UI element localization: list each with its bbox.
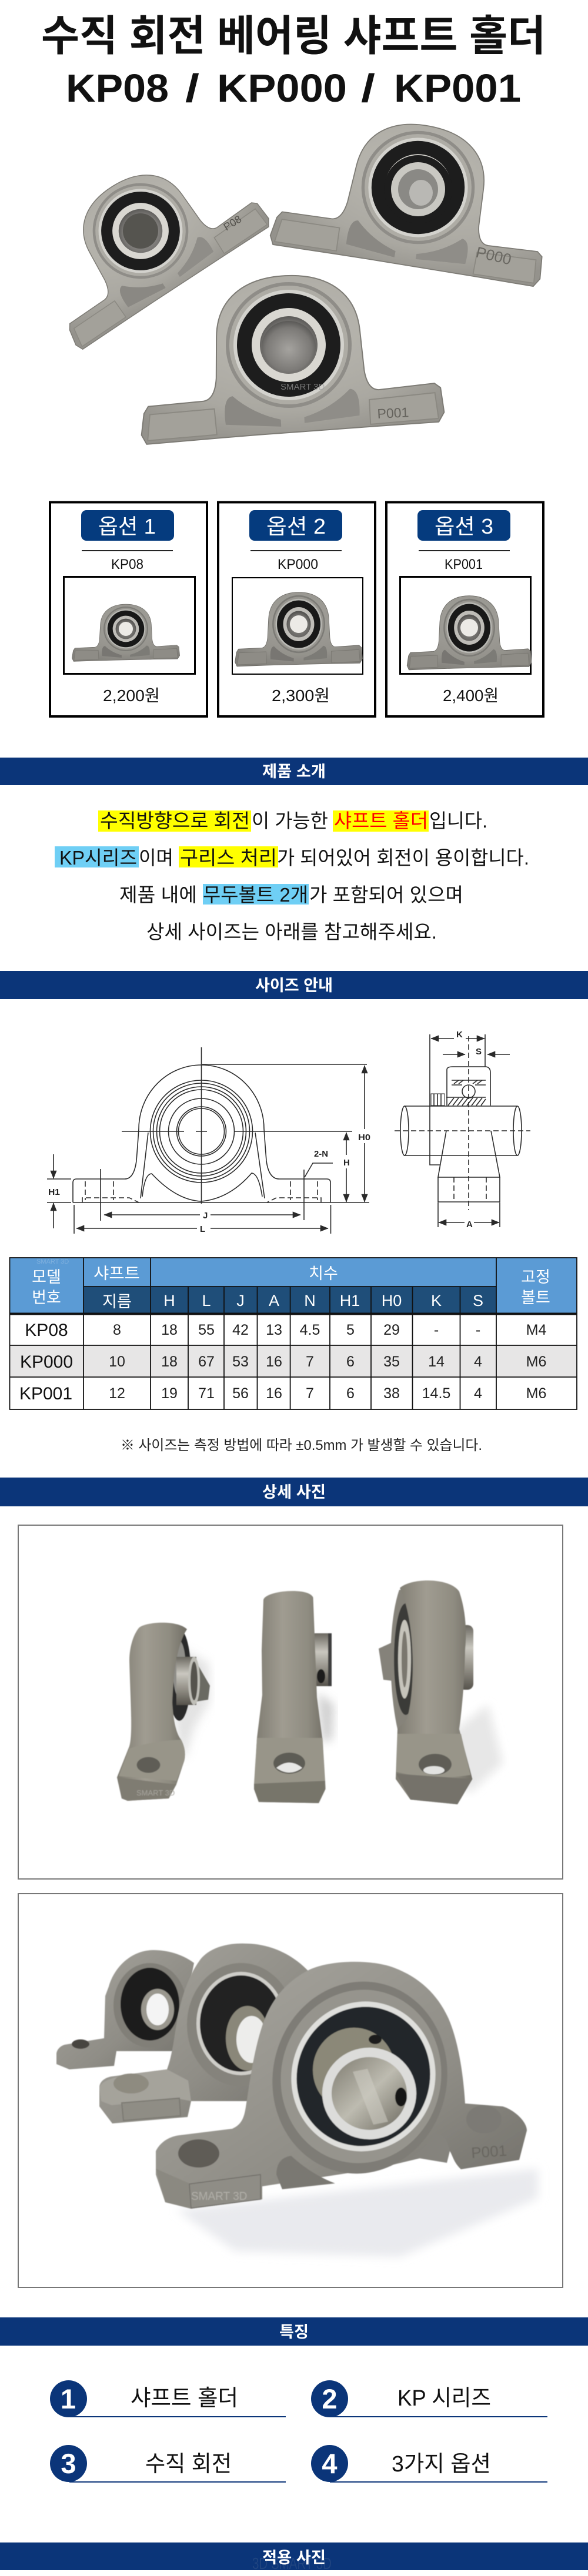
K dimension [430,1030,485,1106]
specification table [9,1258,577,1409]
product KP001 [133,268,445,444]
feature 1: 샤프트 홀더 [131,2386,238,2411]
bar title: 적용 사진 [262,2549,326,2567]
watermark: SMART 3D [280,382,325,392]
product KP08 [15,125,275,351]
row KP001: KP001 [19,1384,72,1403]
row KP001: 19 [161,1385,178,1402]
table header labels: 지름 [102,1293,132,1311]
row KP000: 4 [474,1354,482,1370]
housing and base [438,1067,500,1202]
feature 1 [50,2380,286,2417]
intro line 3: 무두볼트 2개 [203,884,308,906]
row KP08: 8 [113,1322,121,1338]
price: 2,300원 [272,686,330,705]
row KP000: 14 [428,1354,445,1370]
section bar: size guide: 사이즈 안내 [255,977,333,994]
2-N callout [305,1149,333,1177]
2-N callout: 2-N [314,1149,328,1159]
option cards [50,502,543,716]
product KP001: P001 [377,404,409,421]
housing rings [255,1965,465,2190]
feature 1: 1 [61,2383,76,2414]
title line 2: KP000 [217,66,347,110]
table header labels: N [304,1292,316,1309]
table grid [9,1258,577,1409]
intro line 2: 이며 [139,847,173,869]
section bar: features: 특징 [279,2323,309,2341]
table header labels: H0 [382,1292,402,1309]
bar watermark: 3D SMART 3D [252,2554,332,2572]
option 2 pill [249,510,342,541]
row KP001: 16 [266,1385,282,1402]
row KP08: 42 [232,1322,249,1338]
intro line 1 [98,810,487,832]
product KP000: P000 [475,243,513,269]
section bar: features [0,2317,588,2346]
option 3 pill: 옵션 3 [435,514,493,538]
option photo frame [232,578,363,674]
row KP000: 10 [109,1354,125,1370]
price: 2,200원 [103,686,160,705]
feature 4: 4 [322,2448,338,2479]
S dimension: S [476,1047,482,1057]
table header labels: 고정 [521,1268,550,1286]
row KP001: M6 [526,1385,546,1402]
intro line 2: KP시리즈 [59,847,137,869]
intro line 1: 샤프트 홀더 [334,810,428,832]
H dimension: H [343,1158,350,1168]
detail photo 2: perspective view of three holders [18,1894,563,2287]
title line 2: KP08 [66,66,169,110]
row KP08: 5 [346,1322,355,1338]
row KP08: 18 [161,1322,178,1338]
table header labels: 치수 [309,1265,338,1282]
intro line 1: 입니다. [429,810,487,832]
option 1 pill [81,510,174,541]
feature 3: 수직 회전 [145,2452,232,2477]
row KP000: 18 [161,1354,178,1370]
row KP000: 16 [266,1354,282,1370]
feature 3 [50,2445,286,2483]
row KP000: M6 [526,1354,546,1370]
row KP08: - [476,1322,480,1338]
centre lines [122,1047,352,1204]
option card 2 [218,502,375,716]
option card 1 [50,502,207,716]
intro line 3: 가 포함되어 있으며 [309,884,463,906]
option 3 pill [417,510,510,541]
feature list [50,2380,547,2483]
product intro text [55,810,529,943]
table header background [9,1258,577,1313]
option 1 pill: 옵션 1 [98,514,156,538]
collar and set screw [430,1094,445,1165]
row KP001: 14.5 [422,1385,450,1402]
row KP000: 7 [306,1354,314,1370]
table header labels: 볼트 [521,1289,550,1307]
price: 2,400원 [443,686,499,705]
technical drawing: front view [47,1047,370,1234]
section bar: detail photos [0,1478,588,1506]
model name: KP001 [445,557,483,572]
option photo frame [64,577,195,674]
product KP000 [269,101,564,293]
row KP08: 13 [266,1322,282,1338]
back holder [56,1950,194,2069]
middle holder [254,1591,334,1803]
option photo frame [400,577,532,674]
table rows background [9,1315,577,1409]
section bar: application photos [0,2542,588,2572]
L dimension: L [200,1224,205,1234]
J dimension: J [203,1211,208,1221]
A dimension [438,1202,500,1230]
centre lines [395,1036,530,1210]
intro line 4: 상세 사이즈는 아래를 참고해주세요. [146,921,437,943]
front foot face [156,2169,262,2209]
table header labels [32,1265,550,1311]
option 2 pill: 옵션 2 [266,514,326,538]
right holder [379,1580,503,1804]
S dimension [443,1047,510,1057]
H0 dimension: H0 [358,1133,370,1143]
main product photo: three bearing holders [15,101,564,444]
table header labels: A [269,1292,279,1309]
section bar: detail photos: 상세 사진 [262,1483,326,1501]
A dimension: A [466,1220,473,1230]
model name: KP000 [278,557,318,572]
feature 2: KP 시리즈 [397,2386,491,2411]
row KP000: KP000 [20,1352,73,1372]
feature 2 [311,2380,547,2417]
title line 2: KP001 [394,66,521,110]
intro line 3: 제품 내에 [119,884,197,906]
row KP08: 29 [383,1322,400,1338]
row KP000: 67 [198,1354,215,1370]
row KP001: 6 [346,1385,355,1402]
row KP08: KP08 [25,1321,68,1340]
table surface shadow [176,2169,538,2257]
intro line 2 [55,846,529,869]
table header labels: J [236,1292,245,1309]
technical drawing: side view [395,1030,530,1230]
table header labels: 모델 [32,1268,61,1286]
title line 2: / [361,66,375,110]
model name: KP08 [111,557,143,572]
bearing rings [151,1080,253,1183]
title line 2: / [185,66,199,110]
row KP000 [20,1352,546,1372]
title [41,13,546,110]
row KP000: 6 [346,1354,355,1370]
feature 3: 3 [61,2448,76,2479]
row KP000: 35 [383,1354,400,1370]
intro line 2: 구리스 처리 [180,847,277,869]
row KP08: M4 [526,1322,546,1338]
table header labels: H1 [340,1292,360,1309]
watermark: SMART 3D [191,2190,247,2203]
row KP001: 56 [232,1385,249,1402]
table header labels: 번호 [32,1289,61,1307]
intro line 2: 가 되어있어 회전이 용이합니다. [277,847,529,869]
mounting hole hidden lines [85,1181,318,1200]
row KP000: 53 [232,1354,249,1370]
table header labels: L [202,1292,211,1309]
table header labels: S [473,1292,483,1309]
intro line 1: 수직방향으로 회전 [100,810,250,832]
row KP001: 38 [383,1385,400,1402]
section bar: product intro: 제품 소개 [262,763,326,780]
foot holes [178,2139,219,2168]
K dimension: K [456,1030,463,1040]
front holder [156,1962,527,2209]
watermark: SMART 3D [136,1788,175,1797]
table watermark: SMART 3D [36,1258,69,1265]
arch shadows [276,2156,335,2189]
section bar: product intro [0,758,588,785]
shaft [400,1106,522,1155]
intro line 3 [119,884,463,906]
intro line 1: 이 가능한 [252,810,328,832]
row KP001: 7 [306,1385,314,1402]
bearing section with ball [446,1080,486,1106]
title line 2 [66,66,521,110]
table header labels: 샤프트 [93,1265,140,1282]
table header labels: H [163,1292,175,1309]
row KP08: - [434,1322,439,1338]
housing outline [73,1065,330,1202]
section bar: size guide [0,971,588,999]
H dimension [343,1133,350,1202]
left holder [117,1623,210,1801]
row KP08: 55 [198,1322,215,1338]
feature 4 [311,2445,547,2483]
row KP001 [19,1384,546,1403]
row KP08: 4.5 [300,1322,320,1338]
table header labels: K [431,1292,442,1309]
size note: ※ 사이즈는 측정 방법에 따라 ±0.5mm 가 발생할 수 있습니다. [121,1438,482,1453]
H1 dimension: H1 [48,1187,60,1197]
row KP001: 71 [198,1385,215,1402]
detail photo 1: side view of three holders [18,1525,563,1879]
row KP08 [25,1321,546,1340]
row KP001: 12 [109,1385,125,1402]
row KP001: 4 [474,1385,482,1402]
inner collar [313,2028,395,2112]
option card 3 [386,502,543,716]
middle holder [99,1944,312,2123]
H1 dimension [47,1154,71,1228]
feature 4: 3가지 옵션 [392,2452,491,2477]
title line 1: 수직 회전 베어링 샤프트 홀더 [41,13,546,60]
product KP08: P08 [222,213,243,233]
right foot emboss: P001 [470,2142,507,2162]
feature 2: 2 [322,2383,338,2414]
